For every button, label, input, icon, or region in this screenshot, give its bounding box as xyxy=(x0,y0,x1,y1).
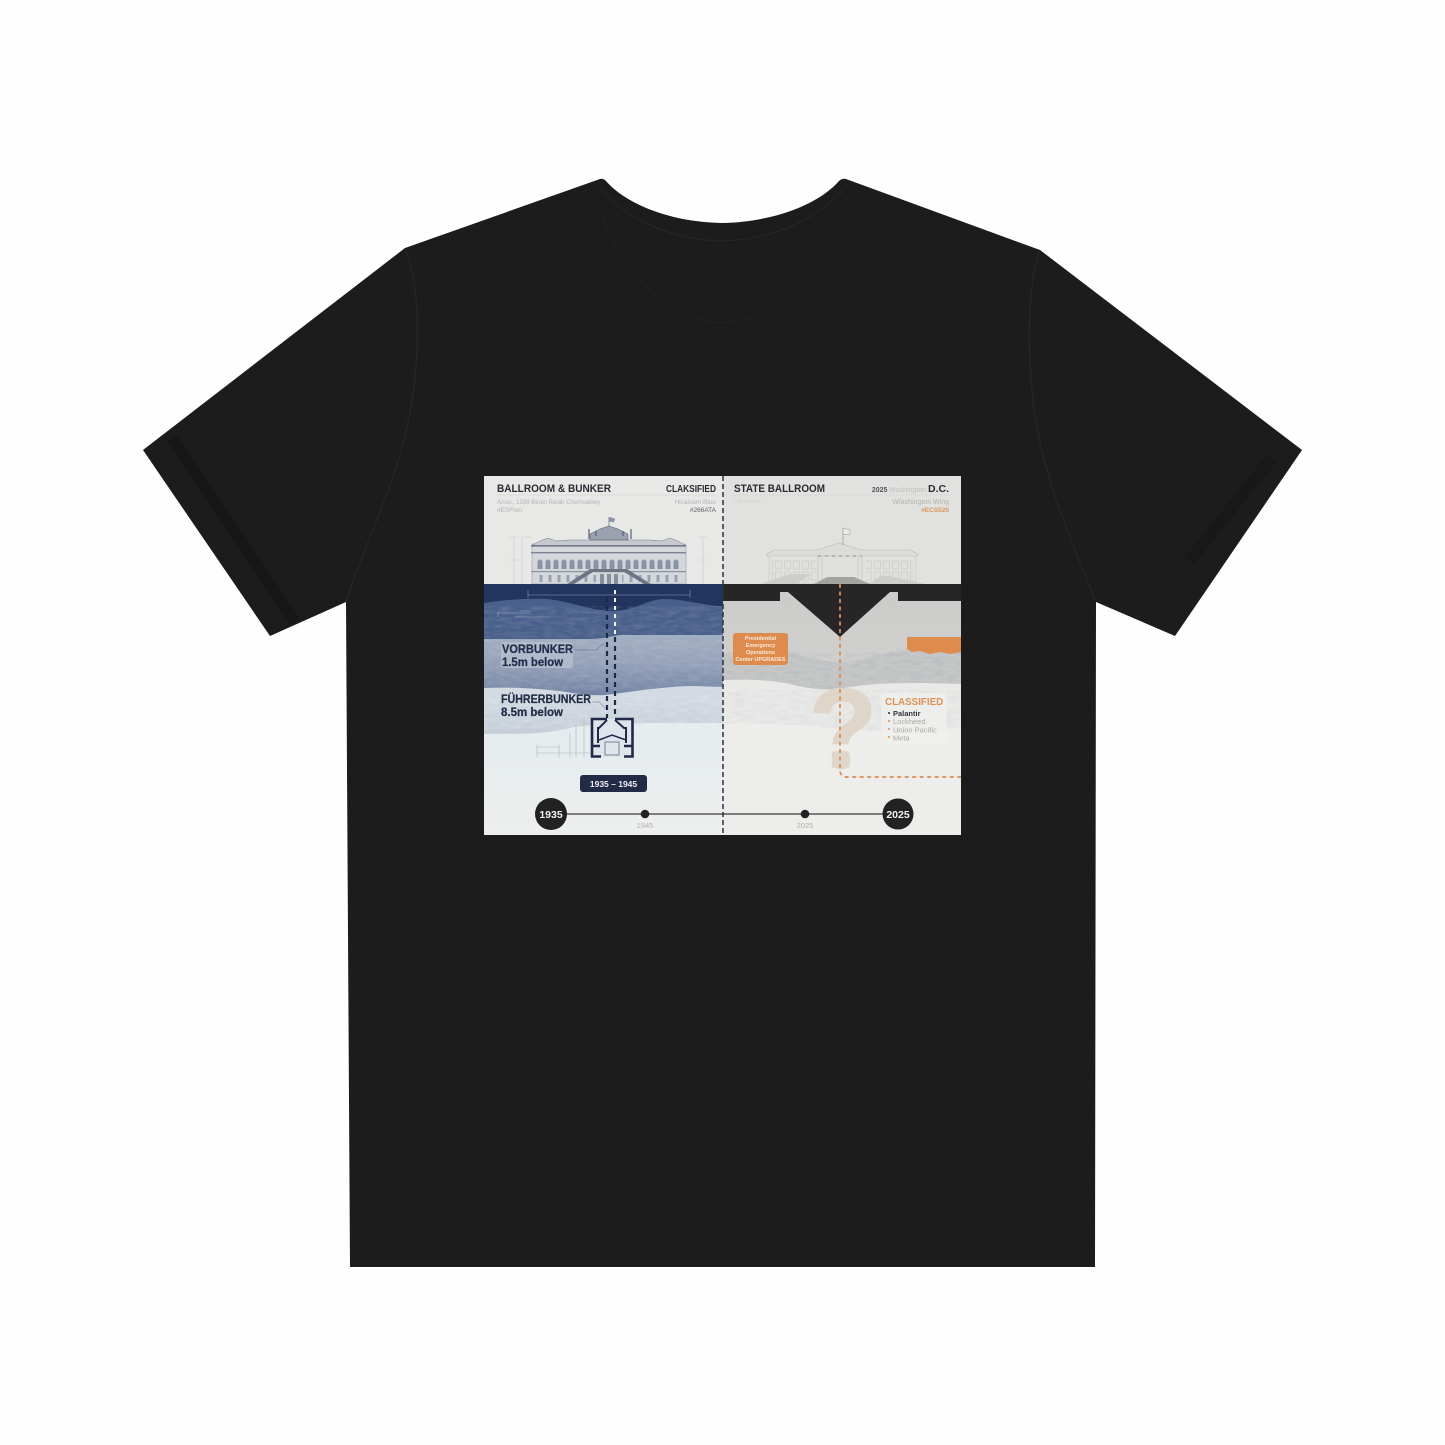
date badge: 1935 – 1945 xyxy=(590,779,637,789)
callout: Presidential Emergency Operations Center upgrades: Presidential xyxy=(745,636,777,642)
panel: right header background xyxy=(723,476,961,584)
white dimension lines in blue band xyxy=(498,590,690,617)
1945 marker xyxy=(637,810,653,830)
left classification label: CLAKSIFIED xyxy=(666,483,716,495)
t-shirt xyxy=(143,179,1302,1267)
central dashed divider xyxy=(722,476,724,835)
callout: Presidential Emergency Operations Center upgrades: Emergency xyxy=(746,643,776,649)
Vorbunker label: VORBUNKER xyxy=(502,642,573,656)
pale grey ground xyxy=(723,592,961,662)
right shaft lower xyxy=(614,637,616,718)
left colour name: Hicaisam Blue xyxy=(674,499,716,506)
callout: classified list: CLASSIFIED xyxy=(885,697,943,708)
right building elevation xyxy=(760,528,925,584)
left tag: #ESFion xyxy=(497,507,522,514)
light layer xyxy=(484,686,723,734)
excavation black shape xyxy=(723,584,961,637)
1935 marker: 1935 xyxy=(539,809,563,821)
left shaft xyxy=(606,597,608,718)
dark blue upper band xyxy=(484,584,723,611)
callout: classified list: Union Pacific xyxy=(893,726,937,734)
lower pale ground xyxy=(724,724,961,730)
right wing name: W/ashington Wing xyxy=(892,499,949,506)
right shaft xyxy=(614,590,616,635)
question mark: ? xyxy=(809,666,877,791)
icon: bunker floor plan xyxy=(537,718,633,757)
2025 marker xyxy=(882,798,914,830)
1935 marker xyxy=(535,798,567,830)
white snow layer xyxy=(723,680,961,732)
callout: Presidential Emergency Operations Center upgrades: Operations xyxy=(746,650,775,656)
grey-blue mid layer xyxy=(484,635,723,700)
right heading: STATE BALLROOM xyxy=(734,483,825,495)
orange dashed route xyxy=(840,584,961,777)
2025 small marker: 2025 xyxy=(797,821,813,830)
mid layer texture xyxy=(484,640,723,690)
snow texture xyxy=(723,690,961,730)
panel: right underground cross-section xyxy=(723,584,961,835)
callout: classified list: Meta xyxy=(893,734,911,742)
Vorbunker label: 1.5m below xyxy=(502,655,564,669)
callout: classified list: Palantir xyxy=(893,709,921,718)
right colour code: #ECS520 xyxy=(921,507,949,514)
Fuhrerbunker label: FÜHRERBUNKER xyxy=(501,691,591,706)
2025 small marker xyxy=(797,810,813,830)
blue soil texture xyxy=(484,606,723,638)
Fuhrerbunker label: 8.5m below xyxy=(501,705,564,719)
header rules xyxy=(497,494,949,496)
right date and place: 2025 Washington D.C. xyxy=(872,483,949,495)
orange redacted block xyxy=(907,637,961,654)
print artwork xyxy=(484,476,961,835)
panel: left header background xyxy=(484,476,723,584)
callout: Presidential Emergency Operations Center upgrades: Center UPGRADES xyxy=(735,657,786,663)
date badge xyxy=(580,775,647,792)
left building elevation xyxy=(510,517,707,584)
blue soil layer xyxy=(484,598,723,639)
left heading: BALLROOM & BUNKER xyxy=(497,483,611,495)
grey textured hill xyxy=(723,650,961,689)
callout: Presidential Emergency Operations Center upgrades xyxy=(733,633,788,665)
panel: left underground cross-section xyxy=(484,584,723,835)
1945 marker: 1945 xyxy=(637,821,653,830)
timeline xyxy=(535,798,914,830)
left colour code: #266ATA xyxy=(690,507,717,514)
left sub text: Anion, 1338 Benin Relah Chemuatiley xyxy=(497,499,601,506)
pale layer texture xyxy=(484,695,723,730)
right faint sub text: Lantimore xyxy=(734,499,761,505)
callout: classified list: Lockheed xyxy=(893,717,926,726)
Vorbunker label xyxy=(501,642,604,669)
Fuhrerbunker label xyxy=(501,691,606,719)
2025 marker: 2025 xyxy=(886,809,910,821)
callout: classified list xyxy=(881,693,947,744)
pale lower layer xyxy=(484,723,723,835)
hill texture xyxy=(728,652,961,689)
